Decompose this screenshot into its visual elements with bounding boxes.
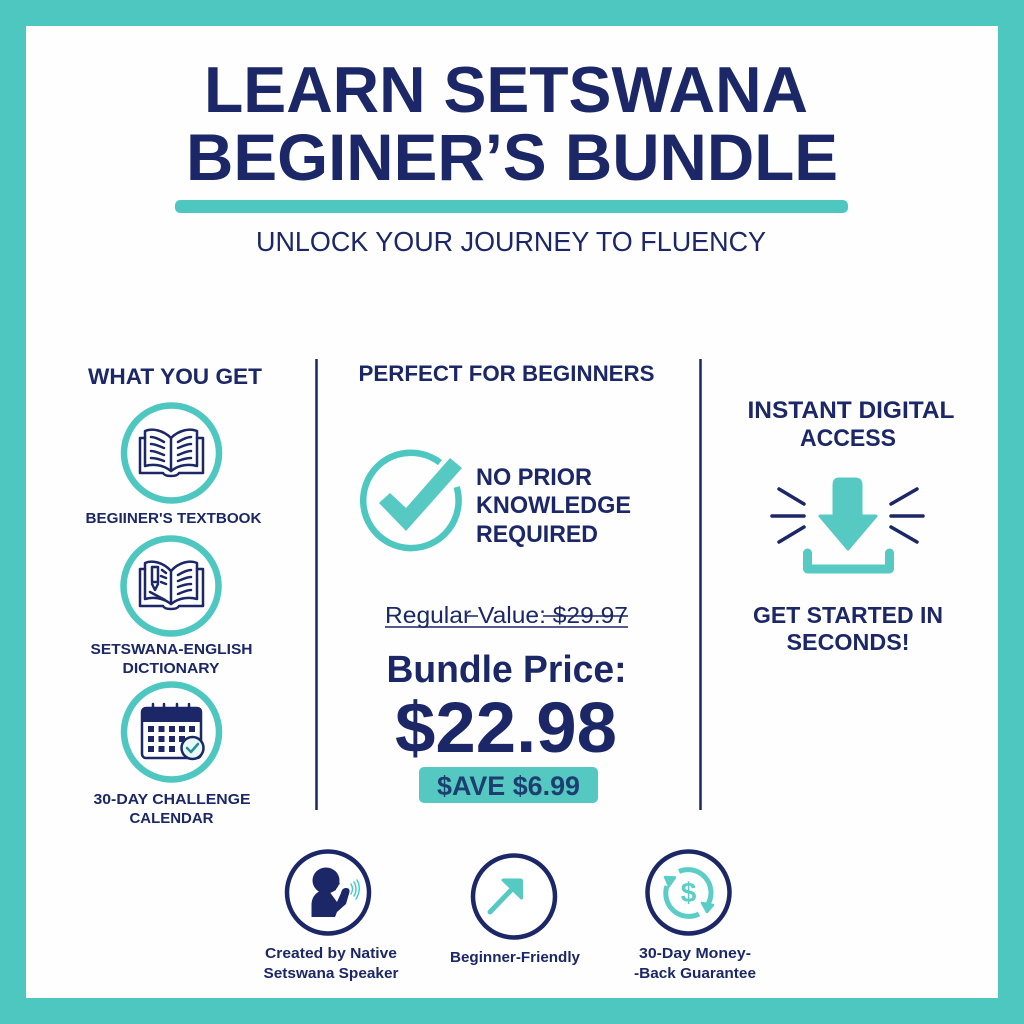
icon: download: [772, 479, 923, 569]
text: no prior knowledge: REQUIRED: [476, 521, 598, 548]
text: get started: SECONDS!: [786, 629, 910, 655]
label: beginner friendly: Beginner-Friendly: [450, 950, 580, 966]
title: BEGINER’S BUNDLE: [186, 120, 838, 194]
icon: dictionary: [124, 538, 218, 634]
icon: textbook: [124, 406, 219, 500]
label: dictionary: [90, 641, 252, 677]
label: money back: 30-Day Money-: [639, 946, 751, 962]
label: native speaker: [264, 946, 399, 982]
regular value: Regular Value: $29.97: [385, 602, 628, 628]
bundle price label: Bundle Price:: [386, 649, 626, 691]
heading: what you get: WHAT YOU GET: [88, 364, 263, 389]
text: no prior knowledge: KNOWLEDGE: [476, 492, 631, 519]
label: calendar: 30-DAY CHALLENGE: [94, 791, 250, 808]
label: textbook: BEGIINER'S TEXTBOOK: [86, 511, 262, 527]
text: get started: GET STARTED IN: [753, 602, 943, 628]
label: dictionary: DICTIONARY: [122, 660, 220, 677]
badge: beginner friendly: [450, 856, 580, 966]
badge: money back: [634, 852, 756, 982]
text: no prior knowledge: NO PRIOR: [476, 464, 592, 491]
icon: speaker: [287, 852, 369, 934]
heading: instant digital access: INSTANT DIGITAL: [748, 397, 954, 424]
label: native speaker: Setswana Speaker: [264, 966, 399, 982]
label: native speaker: Created by Native: [265, 946, 397, 962]
text: get started: [753, 602, 943, 655]
label: money back: -Back Guarantee: [634, 966, 756, 982]
icon: arrow: [473, 856, 555, 938]
label: money back: [634, 946, 756, 982]
icon: money back: $: [681, 877, 697, 908]
label: calendar: CALENDAR: [130, 810, 214, 827]
panel: instant digital access: [748, 397, 954, 655]
heading: instant digital access: [748, 397, 954, 452]
heading: instant digital access: ACCESS: [800, 425, 896, 452]
subtitle: UNLOCK YOUR JOURNEY TO FLUENCY: [256, 226, 766, 257]
label: dictionary: SETSWANA-ENGLISH: [90, 641, 252, 658]
icon: calendar: [124, 684, 219, 780]
label: calendar: [94, 791, 250, 827]
heading: perfect for beginners: PERFECT FOR BEGINNERS: [358, 361, 654, 386]
badge: native speaker: [264, 852, 399, 982]
save badge: [419, 767, 598, 803]
price: $22.98: [395, 689, 617, 768]
save badge: $AVE $6.99: [437, 771, 580, 801]
panel: perfect for beginners: [358, 361, 654, 803]
title: [186, 53, 838, 194]
icon: check mark: [363, 453, 462, 548]
title: LEARN SETSWANA: [204, 53, 808, 126]
text: no prior knowledge: [476, 464, 631, 548]
panel: what you get: [86, 364, 263, 827]
title underline: [175, 200, 848, 213]
